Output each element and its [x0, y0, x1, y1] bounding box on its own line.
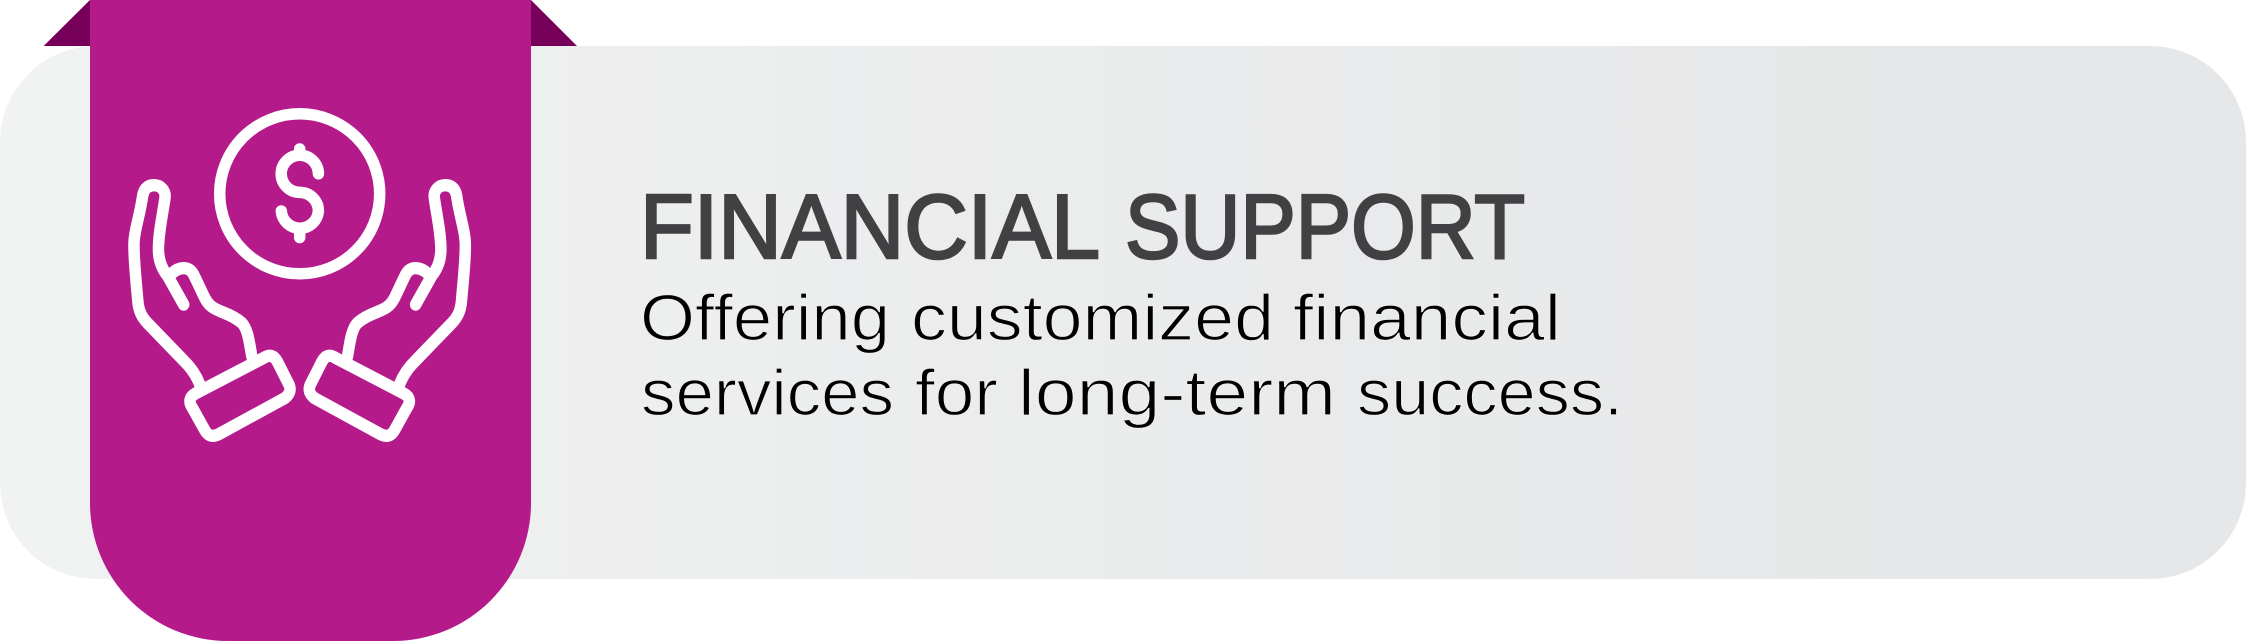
heading	[640, 177, 1525, 278]
body text: long-term	[1018, 356, 1336, 429]
body text: Offering	[640, 281, 890, 354]
heading: FINANCIAL	[640, 177, 1100, 278]
ribbon: magenta banner	[90, 0, 531, 641]
heading: SUPPORT	[1125, 177, 1525, 278]
body text: customized	[911, 281, 1274, 354]
icon: coin ring	[220, 114, 380, 274]
body text: success.	[1357, 356, 1623, 429]
ribbon fold: left	[44, 0, 90, 46]
body text: for	[915, 356, 998, 429]
icon: left hand	[134, 185, 290, 436]
icon: right hand	[309, 185, 465, 436]
icon: hands holding dollar coin	[134, 114, 465, 436]
body text: financial	[1293, 281, 1561, 354]
body text	[640, 281, 1623, 429]
ribbon fold: right	[531, 0, 577, 46]
icon: dollar sign	[281, 149, 318, 238]
body text: services	[641, 356, 894, 429]
